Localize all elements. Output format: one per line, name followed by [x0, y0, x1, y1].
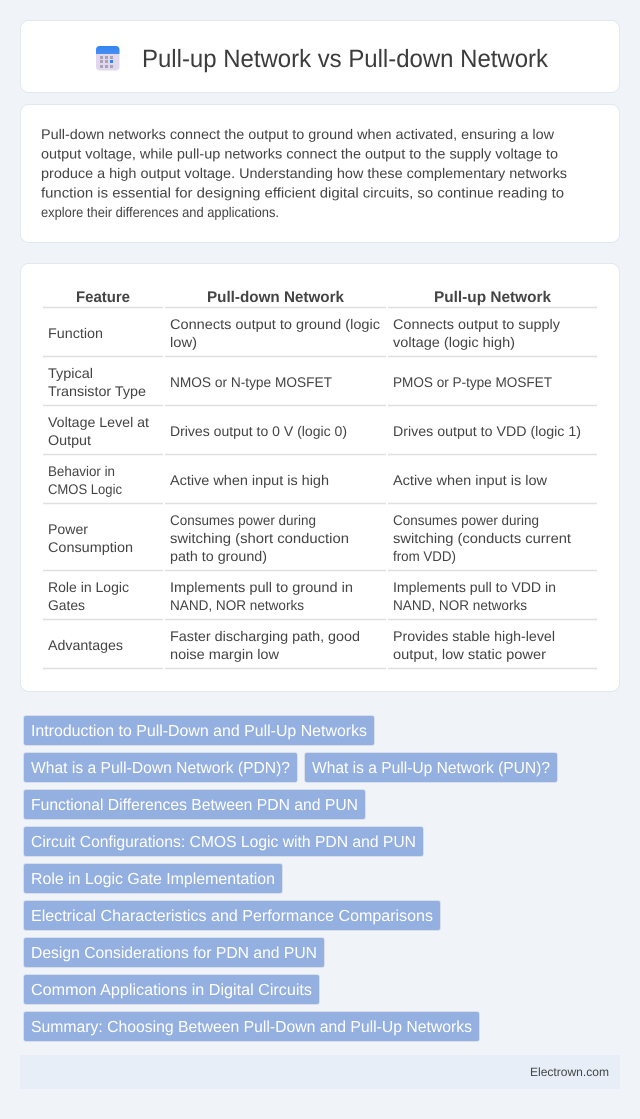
table row: voltage level: Drives output to 0 V (logic 0): [170, 423, 347, 439]
table row: advantages: Advantages: [48, 637, 123, 653]
table row: power consumption: switching (conducts current: [393, 530, 571, 546]
tag: what is a PDN: [24, 752, 298, 782]
text block: intro paragraph: function is essential for designing efficient digital circuits, so continue reading to: [41, 184, 564, 200]
tag: circuit configurations: Circuit Configurations: CMOS Logic with PDN and PUN: [31, 834, 416, 851]
icon: calendar grid: [96, 46, 120, 70]
table header row: [76, 289, 551, 306]
table row: advantages: noise margin low: [170, 646, 280, 662]
tag: role in logic gate: [24, 864, 282, 894]
tag: introduction: [24, 716, 374, 746]
table row: function: [48, 316, 560, 350]
table row: transistor type: Typical: [48, 365, 93, 381]
table row: CMOS behavior: CMOS Logic: [48, 481, 122, 497]
tag: functional differences: Functional Differences Between PDN and PUN: [31, 797, 358, 814]
table row: transistor type: [48, 365, 552, 399]
tag: role in logic gate: Role in Logic Gate Implementation: [31, 871, 275, 888]
footer: [20, 1055, 620, 1089]
tag: electrical characteristics: [24, 900, 440, 930]
text block: intro paragraph: explore their differences and applications.: [41, 204, 279, 220]
table row: advantages: Provides stable high-level: [393, 628, 555, 644]
table row: power consumption: Consumption: [48, 539, 133, 555]
table row: transistor type: Transistor Type: [48, 383, 146, 399]
footer credit: Electrown.com: [530, 1065, 609, 1079]
table row: power consumption: Consumes power during: [393, 512, 539, 528]
topic tags: [24, 716, 558, 1042]
panel: header: [20, 20, 620, 92]
table row: voltage level: Output: [48, 432, 91, 448]
tag: summary: Summary: Choosing Between Pull-Down and Pull-Up Networks: [31, 1019, 472, 1036]
table row: power consumption: Consumes power during: [170, 512, 316, 528]
table row: CMOS behavior: Active when input is low: [393, 472, 548, 488]
table row: advantages: [48, 628, 555, 662]
table row: transistor type: PMOS or P-type MOSFET: [393, 374, 552, 390]
table row: CMOS behavior: Active when input is high: [170, 472, 329, 488]
table header row: Pull-up Network: [434, 289, 551, 306]
table row: role in logic gates: Gates: [48, 597, 85, 613]
tag: common applications: Common Applications in Digital Circuits: [31, 982, 312, 999]
table row: function: low): [170, 334, 197, 350]
table row: function: voltage (logic high): [393, 334, 515, 350]
table row: role in logic gates: NAND, NOR networks: [170, 597, 304, 613]
panel: introduction: [20, 104, 620, 242]
table row: role in logic gates: Role in Logic: [48, 579, 129, 595]
tag: what is a PUN: What is a Pull-Up Network (PUN)?: [312, 760, 550, 777]
table row: advantages: output, low static power: [393, 646, 546, 662]
tag: circuit configurations: [24, 826, 424, 856]
table row: power consumption: [48, 512, 571, 564]
text block: intro paragraph: [41, 126, 567, 220]
table row: power consumption: path to ground): [170, 548, 267, 564]
table header row: Feature: [76, 289, 130, 306]
table row: advantages: Faster discharging path, good: [170, 628, 360, 644]
table row: role in logic gates: NAND, NOR networks: [393, 597, 527, 613]
title: Pull-up Network vs Pull-down Network: [142, 45, 548, 73]
tag: summary: [24, 1012, 480, 1042]
table row: role in logic gates: [48, 579, 556, 613]
panel: comparison table: [20, 264, 620, 692]
table header row: Pull-down Network: [207, 289, 344, 306]
table row: power consumption: from VDD): [393, 548, 456, 564]
tag: common applications: [24, 974, 320, 1004]
table row: role in logic gates: Implements pull to VDD in: [393, 579, 556, 595]
table row: function: Connects output to ground (logic: [170, 316, 380, 332]
text block: intro paragraph: produce a high output voltage. Understanding how these complementary networks: [41, 165, 567, 181]
table row: voltage level: Drives output to VDD (logic 1): [393, 423, 581, 439]
tag: introduction: Introduction to Pull-Down and Pull-Up Networks: [31, 723, 367, 740]
tag: functional differences: [24, 790, 366, 820]
tag: electrical characteristics: Electrical Characteristics and Performance Comparisons: [31, 908, 433, 925]
text block: intro paragraph: output voltage, while pull-up networks connect the output to the supply voltage to: [41, 146, 558, 162]
table row: transistor type: NMOS or N-type MOSFET: [170, 374, 332, 390]
tag: what is a PDN: What is a Pull-Down Network (PDN)?: [31, 760, 290, 777]
table row: role in logic gates: Implements pull to ground in: [170, 579, 353, 595]
table row: function: Function: [48, 325, 103, 341]
table row: function: Connects output to supply: [393, 316, 560, 332]
table row: power consumption: Power: [48, 521, 88, 537]
text block: intro paragraph: Pull-down networks connect the output to ground when activated, ensuring a low: [41, 126, 555, 142]
tag: design considerations: [24, 938, 324, 968]
tag: design considerations: Design Considerations for PDN and PUN: [31, 945, 317, 962]
table row: power consumption: switching (short conduction: [170, 530, 349, 546]
tag: what is a PUN: [304, 752, 558, 782]
table row: CMOS behavior: Behavior in: [48, 463, 115, 479]
table row: CMOS behavior: [48, 463, 548, 497]
table row: voltage level: Voltage Level at: [48, 414, 149, 430]
table row: voltage level: [48, 414, 581, 448]
